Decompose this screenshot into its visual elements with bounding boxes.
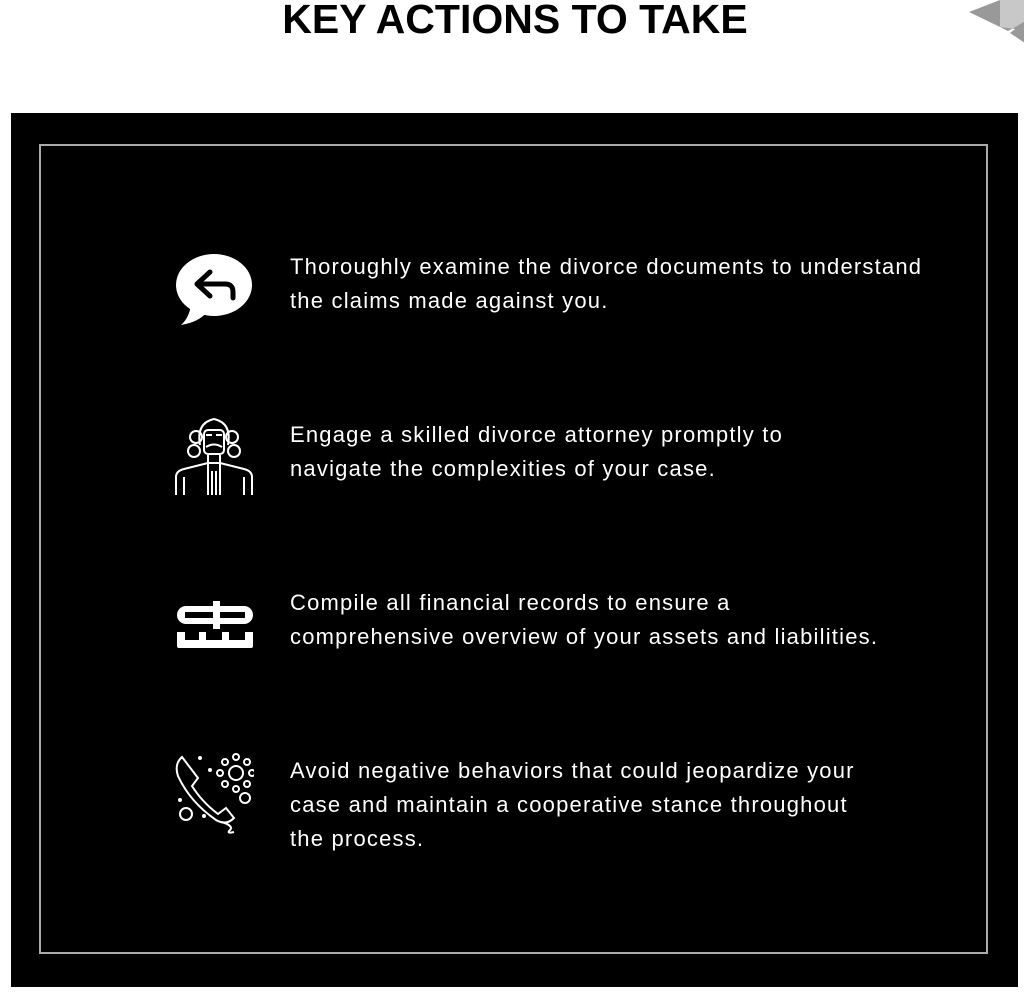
text: item 4: case and maintain a cooperative stance throughout: [290, 792, 848, 817]
corner decoration: [969, 0, 1024, 42]
text: item 1: the claims made against you.: [290, 288, 609, 313]
inner border: [39, 144, 988, 954]
text: item 4: the process.: [290, 826, 424, 851]
text: item 2: [290, 422, 783, 481]
icon: financial records: [177, 601, 253, 648]
text: item 3: [290, 590, 878, 649]
icon: speech bubble reply: [176, 254, 252, 325]
text: item 2: Engage a skilled divorce attorney promptly to: [290, 422, 783, 447]
text: item 3: Compile all financial records to ensure a: [290, 590, 731, 615]
icon: attorney: [175, 418, 253, 495]
text: item 3: comprehensive overview of your assets and liabilities.: [290, 624, 878, 649]
text: item 4: Avoid negative behaviors that could jeopardize your: [290, 758, 855, 783]
text: item 4: [290, 758, 855, 851]
text: item 1: Thoroughly examine the divorce documents to understand: [290, 254, 922, 279]
text: item 2: navigate the complexities of your case.: [290, 456, 716, 481]
icon: phone: [176, 753, 254, 834]
text: item 1: [290, 254, 922, 313]
